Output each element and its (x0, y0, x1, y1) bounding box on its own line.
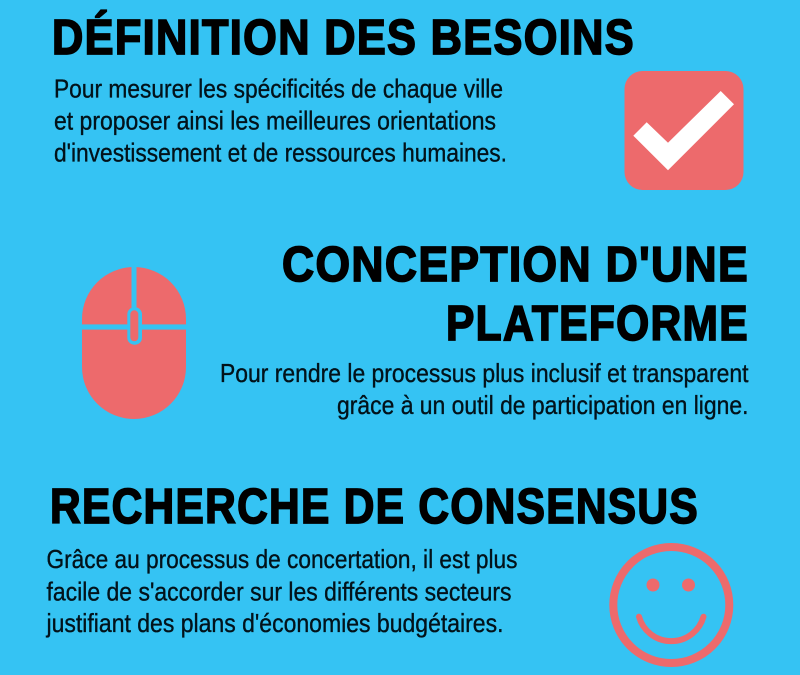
text block: définition des besoins: d'investissement et de ressources humaines. (54, 138, 507, 168)
heading: recherche de consensus: RECHERCHE DE CONSENSUS (50, 480, 699, 534)
heading: conception d'une plateforme: CONCEPTION D'UNE (282, 238, 749, 292)
text block: définition des besoins: et proposer ainsi les meilleures orientations (54, 106, 496, 136)
text block: recherche de consensus: justifiant des plans d'économies budgétaires. (46, 608, 503, 638)
heading: conception d'une plateforme: PLATEFORME (446, 297, 749, 351)
text block: définition des besoins: Pour mesurer les spécificités de chaque ville (54, 74, 503, 104)
text block: conception d'une plateforme (220, 358, 749, 420)
icon: check mark (624, 71, 744, 190)
text block: recherche de consensus (46, 544, 517, 638)
section: recherche de consensus (46, 480, 729, 663)
heading: définition des besoins: DÉFINITION DES BESOINS (52, 11, 635, 65)
section: conception d'une plateforme (80, 238, 749, 420)
icon: smiley face (613, 547, 729, 663)
section: définition des besoins (52, 11, 744, 190)
icon: computer mouse (80, 264, 188, 419)
text block: conception d'une plateforme: grâce à un outil de participation en ligne. (337, 390, 748, 420)
text block: recherche de consensus: Grâce au processus de concertation, il est plus (46, 544, 518, 574)
heading: conception d'une plateforme (282, 238, 749, 351)
text block: définition des besoins (54, 74, 507, 168)
text block: recherche de consensus: facile de s'accorder sur les différents secteurs (46, 576, 512, 606)
